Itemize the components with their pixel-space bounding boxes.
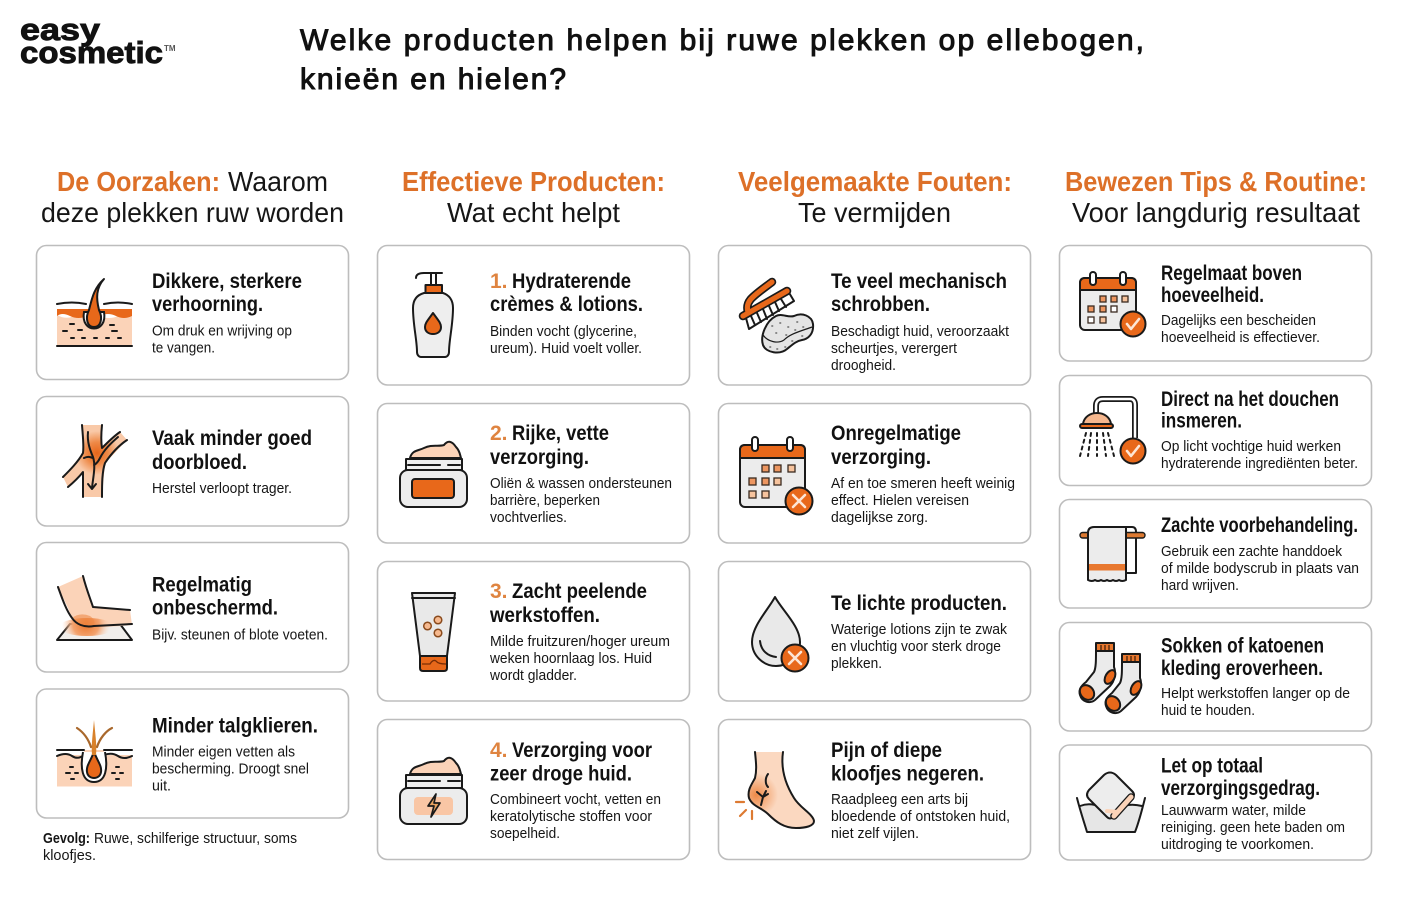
text: sokken of katoenen kleding: Sokken of katoenen — [1161, 634, 1324, 658]
text: minder doorbloed: doorbloed. — [152, 451, 247, 474]
text: zacht peelende werkstoffen: weken hoornlaag los. Huid — [489, 650, 652, 667]
panel: zeer droge huid — [378, 720, 690, 860]
title: Welke producten helpen bij ruwe plekken op ellebogen, — [300, 24, 1144, 57]
text: totaal verzorgingsgedrag — [1161, 754, 1345, 853]
text: minder talgklieren: Minder eigen vetten als — [152, 744, 295, 760]
text: hydraterende cremes: crèmes & lotions. — [490, 293, 643, 316]
text: zachte voorbehandeling — [1161, 514, 1359, 594]
text: te lichte producten — [831, 592, 1007, 672]
column heading: Bewezen Tips en Routine: Voor langdurig resultaat — [1072, 197, 1360, 228]
text: minder doorbloed: Herstel verloopt trager. — [152, 480, 292, 497]
text: zeer droge huid: zeer droge huid. — [490, 762, 632, 786]
icon: cracked heel — [736, 752, 814, 828]
text: dikkere verhoorning: verhoorning. — [152, 293, 263, 316]
text: zacht peelende werkstoffen — [489, 580, 670, 684]
text: te lichte producten: Waterige lotions zijn te zwak — [831, 621, 1007, 638]
panel: zacht peelende werkstoffen — [378, 562, 690, 701]
panel: onregelmatige verzorging — [718, 404, 1030, 543]
text: zacht peelende werkstoffen: Zacht peelende — [512, 580, 647, 603]
panel: pijn of kloofjes negeren — [718, 720, 1030, 860]
text: hydraterende cremes: Hydraterende — [512, 270, 631, 293]
text: rijke verzorging: verzorging. — [490, 446, 589, 469]
text: totaal verzorgingsgedrag: uitdroging te voorkomen. — [1161, 836, 1314, 853]
icon: cream jar with lightning — [400, 758, 467, 824]
text: gevolg — [43, 830, 297, 864]
text: direct na het douchen: Op licht vochtige huid werken — [1161, 438, 1341, 455]
text: pijn of kloofjes negeren — [831, 739, 1010, 842]
icon: skin with sebaceous gland — [57, 720, 132, 786]
text: rijke verzorging: Oliën & wassen ondersteunen — [490, 475, 672, 492]
column heading: Veelgemaakte Fouten: Te vermijden — [798, 197, 951, 228]
column heading: Bewezen Tips en Routine: Bewezen Tips & Routine: — [1065, 166, 1367, 197]
panel: mechanisch schrobben — [718, 246, 1030, 385]
text: direct na het douchen — [1161, 388, 1358, 472]
icon: blood vessels — [63, 425, 127, 497]
text: mechanisch schrobben — [831, 270, 1010, 374]
text: zachte voorbehandeling: Gebruik een zachte handdoek — [1161, 543, 1342, 560]
column heading: De Oorzaken: deze plekken ruw worden — [41, 197, 344, 228]
text: te lichte producten: en vluchtig voor sterk droge — [831, 638, 1001, 655]
icon: peeling tube — [412, 593, 455, 671]
text: direct na het douchen: insmeren. — [1161, 410, 1242, 432]
text: zacht peelende werkstoffen: Milde fruitzuren/hoger ureum — [490, 633, 670, 650]
text: direct na het douchen: hydraterende ingrediënten beter. — [1161, 455, 1358, 472]
text: regelmaat boven hoeveelheid — [1161, 262, 1320, 346]
column heading: De Oorzaken: Waarom — [228, 166, 328, 197]
text: pijn of kloofjes negeren: niet zelf vijlen. — [831, 825, 919, 842]
text: pijn of kloofjes negeren: bloedende of ontstoken huid, — [831, 808, 1010, 825]
panel: regelmaat boven hoeveelheid — [1060, 246, 1372, 361]
text: onregelmatige verzorging: Onregelmatige — [831, 422, 961, 445]
text: dikkere verhoorning: Dikkere, sterkere — [152, 270, 302, 293]
icon: pair of socks — [1077, 643, 1144, 714]
icon: wash basin with cloth — [1077, 772, 1145, 832]
text: hydraterende cremes — [490, 270, 643, 357]
text: gevolg: kloofjes. — [43, 847, 96, 864]
text: mechanisch schrobben: schrobben. — [831, 293, 930, 316]
text: regelmatig onbeschermd: onbeschermd. — [152, 596, 278, 620]
text: onregelmatige verzorging: dagelijkse zorg. — [831, 509, 928, 526]
title — [300, 24, 1144, 96]
text: minder talgklieren: bescherming. Droogt snel — [152, 760, 309, 778]
logo: easy cosmetic: easy — [20, 12, 101, 47]
logo: easy cosmetic: cosmetic — [20, 35, 163, 70]
column heading: Effectieve Producten — [402, 166, 665, 228]
text: regelmatig onbeschermd — [152, 574, 328, 644]
text: regelmaat boven hoeveelheid: Dagelijks een bescheiden — [1161, 312, 1316, 329]
panel: minder doorbloed — [36, 396, 348, 526]
text: zacht peelende werkstoffen: 3. — [490, 580, 508, 603]
panel: sokken of katoenen kleding — [1060, 622, 1372, 731]
text: pijn of kloofjes negeren: Pijn of diepe — [831, 739, 942, 762]
icon: skin layers with hair — [57, 279, 132, 346]
text: totaal verzorgingsgedrag: Lauwwarm water, milde — [1161, 802, 1306, 819]
text: totaal verzorgingsgedrag: Let op totaal — [1161, 754, 1263, 778]
column heading: Bewezen Tips en Routine — [1065, 166, 1367, 228]
text: minder doorbloed: Vaak minder goed — [152, 427, 312, 450]
text: dikkere verhoorning: Om druk en wrijving op — [152, 322, 292, 340]
title: knieën en hielen? — [300, 63, 566, 96]
text: te lichte producten: plekken. — [831, 655, 882, 672]
text: zacht peelende werkstoffen: wordt gladder. — [489, 667, 577, 684]
text: zeer droge huid: 4. — [490, 739, 508, 762]
text: mechanisch schrobben: Te veel mechanisch — [831, 270, 1007, 293]
logo: easy cosmetic — [20, 12, 176, 70]
text: minder talgklieren: uit. — [152, 778, 171, 794]
text: onregelmatige verzorging: effect. Hielen vereisen — [831, 492, 969, 509]
icon: shower with check — [1080, 399, 1146, 464]
text: rijke verzorging: Rijke, vette — [512, 422, 609, 445]
text: zacht peelende werkstoffen: werkstoffen. — [489, 604, 600, 627]
text: zachte voorbehandeling: Zachte voorbehandeling. — [1161, 514, 1358, 537]
text: onregelmatige verzorging — [831, 422, 1015, 526]
text: regelmatig onbeschermd: Regelmatig — [152, 574, 252, 596]
text: mechanisch schrobben: scheurtjes, verergert — [831, 340, 958, 357]
text: zeer droge huid: Verzorging voor — [512, 739, 652, 762]
text: zachte voorbehandeling: of milde bodyscrub in plaats van — [1161, 560, 1359, 577]
column heading: De Oorzaken: De Oorzaken: — [57, 166, 220, 197]
icon: calendar with cross — [740, 437, 812, 514]
text: sokken of katoenen kleding: kleding eroverheen. — [1161, 657, 1323, 680]
text: minder talgklieren: Minder talgklieren. — [152, 714, 318, 738]
text: onregelmatige verzorging: verzorging. — [831, 446, 931, 469]
text: sokken of katoenen kleding: huid te houden. — [1161, 702, 1255, 719]
text: dikkere verhoorning: te vangen. — [152, 340, 215, 356]
text: pijn of kloofjes negeren: Raadpleeg een arts bij — [831, 791, 968, 808]
text: sokken of katoenen kleding: Helpt werkstoffen langer op de — [1161, 685, 1350, 702]
icon: towel on rod — [1080, 527, 1145, 581]
text: totaal verzorgingsgedrag: reiniging. geen hete baden om — [1161, 819, 1345, 836]
text: hydraterende cremes: Binden vocht (glycerine, — [490, 323, 637, 340]
text: gevolg: Ruwe, schilferige structuur, soms — [94, 830, 297, 847]
text: regelmaat boven hoeveelheid: hoeveelheid. — [1161, 284, 1264, 307]
column heading: De Oorzaken — [41, 166, 344, 228]
text: totaal verzorgingsgedrag: verzorgingsgedrag. — [1161, 777, 1320, 800]
logo: easy cosmetic: TM — [164, 44, 176, 53]
text: regelmaat boven hoeveelheid: Regelmaat boven — [1161, 262, 1302, 285]
text: hydraterende cremes: 1. — [490, 270, 508, 293]
column heading: Veelgemaakte Fouten: Veelgemaakte Fouten: — [738, 166, 1012, 197]
panel: totaal verzorgingsgedrag — [1060, 745, 1372, 860]
text: regelmatig onbeschermd: Bijv. steunen of blote voeten. — [152, 626, 328, 644]
icon: water drop with cross — [752, 597, 808, 672]
text: zeer droge huid: Combineert vocht, vetten en — [490, 791, 661, 808]
text: zeer droge huid: keratolytische stoffen voor — [490, 808, 652, 825]
icon: pump bottle — [413, 273, 453, 357]
panel: te lichte producten — [718, 562, 1030, 701]
column heading: Veelgemaakte Fouten — [738, 166, 1012, 228]
panel: zachte voorbehandeling — [1060, 500, 1372, 608]
text: dikkere verhoorning — [152, 270, 302, 356]
text: zeer droge huid: soepelheid. — [490, 825, 560, 842]
text: gevolg: Gevolg: — [43, 830, 90, 847]
text: rijke verzorging — [490, 422, 672, 526]
text: te lichte producten: Te lichte producten. — [831, 592, 1007, 615]
text: zachte voorbehandeling: hard wrijven. — [1161, 577, 1239, 594]
text: rijke verzorging: barrière, beperken — [490, 492, 600, 509]
panel: hydraterende cremes — [378, 246, 690, 385]
text: hydraterende cremes: ureum). Huid voelt voller. — [490, 340, 642, 357]
column heading: Effectieve Producten: Effectieve Producten: — [402, 166, 665, 197]
panel: direct na het douchen — [1060, 376, 1372, 486]
text: zeer droge huid — [490, 739, 661, 842]
text: minder doorbloed — [152, 427, 312, 497]
text: direct na het douchen: Direct na het douchen — [1161, 388, 1339, 411]
text: onregelmatige verzorging: Af en toe smeren heeft weinig — [831, 475, 1015, 492]
panel: minder talgklieren — [36, 689, 348, 818]
text: regelmaat boven hoeveelheid: hoeveelheid is effectiever. — [1161, 329, 1320, 346]
panel: regelmatig onbeschermd — [36, 542, 348, 672]
icon: cream jar with orange label — [400, 442, 467, 507]
text: rijke verzorging: 2. — [490, 422, 508, 445]
panel: rijke verzorging — [378, 404, 690, 543]
text: minder talgklieren — [152, 714, 318, 794]
text: pijn of kloofjes negeren: kloofjes negeren. — [831, 762, 984, 786]
icon: calendar with check — [1080, 272, 1146, 336]
text: mechanisch schrobben: droogheid. — [831, 357, 896, 374]
text: sokken of katoenen kleding — [1161, 634, 1350, 719]
text: mechanisch schrobben: Beschadigt huid, veroorzaakt — [831, 323, 1010, 340]
column heading: Effectieve Producten: Wat echt helpt — [447, 197, 620, 228]
icon: elbow on surface — [57, 576, 132, 640]
text: rijke verzorging: vochtverlies. — [490, 509, 567, 526]
panel: dikkere verhoorning — [36, 246, 348, 380]
icon: brush and sponge — [743, 282, 813, 352]
